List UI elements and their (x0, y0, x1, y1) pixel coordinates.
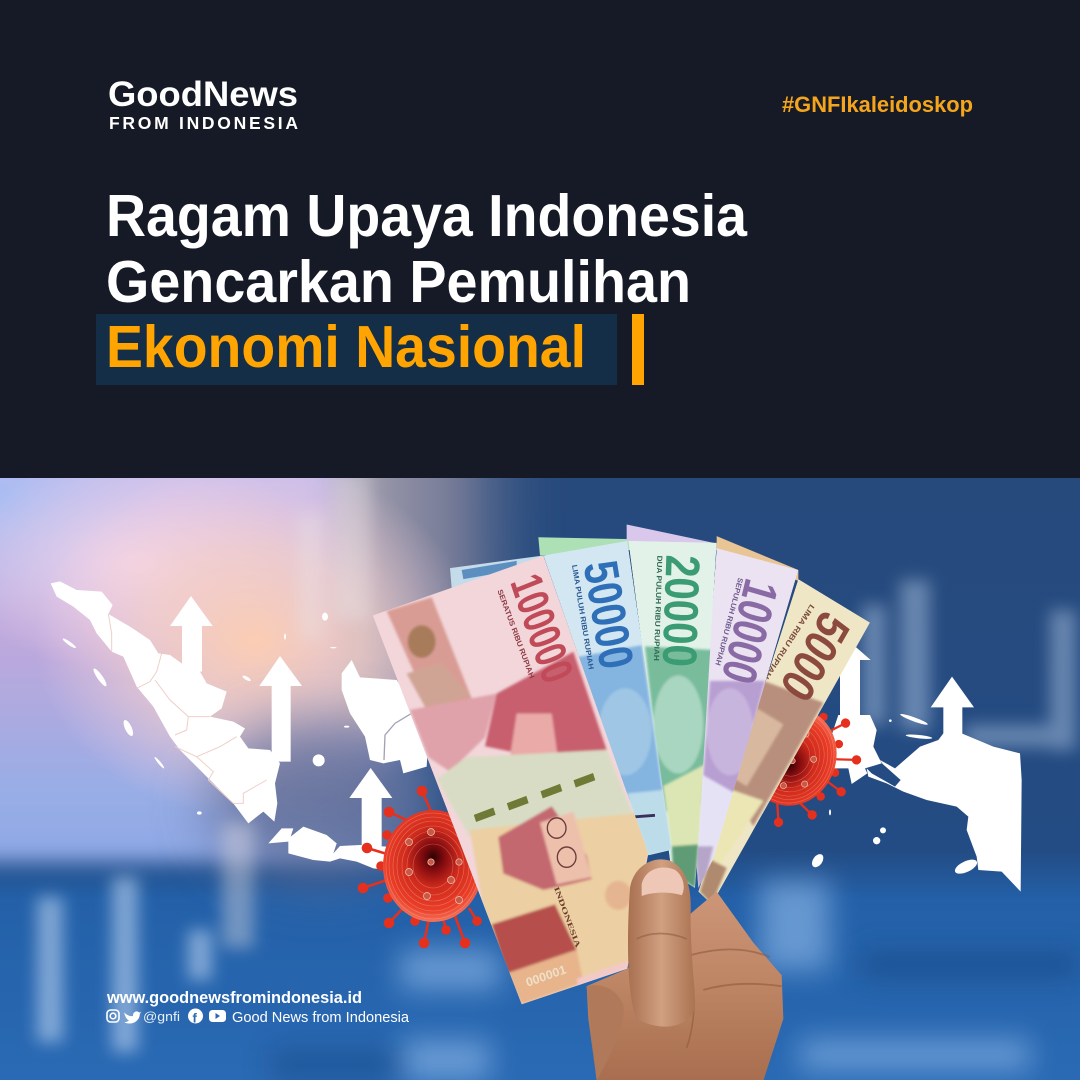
map: Sulawesi (830, 715, 882, 784)
hand holding notes (587, 859, 783, 1080)
banknote: 10000 (695, 548, 798, 888)
icon: facebook: f (192, 1010, 198, 1026)
arrow: up, Papua (931, 677, 974, 737)
icon: facebook (188, 1008, 203, 1024)
footer: website and social handles: www.goodnewsfromindonesia.id (106, 989, 362, 1007)
thumb (628, 859, 695, 1027)
banknote: 10000: SEPULUH RIBU RUPIAH (713, 577, 745, 667)
banknote: 100000: 100000 (501, 567, 583, 690)
banknote: 20000 (628, 541, 717, 888)
icon: youtube (209, 1010, 226, 1022)
icon: coronavirus, right (770, 712, 862, 827)
footer: website and social handles: Good News from Indonesia (232, 1010, 410, 1026)
banknote: 50000: 50000 (573, 556, 644, 673)
arrow: up, Sumatra (170, 596, 213, 672)
arrow: up, Java (349, 768, 392, 847)
banknote: 20000: 20000 (652, 554, 710, 668)
title highlight: Ekonomi Nasional: Ekonomi Nasional (106, 314, 586, 380)
map: eastern islets (810, 712, 979, 877)
map: Java (268, 827, 387, 870)
banknote: 50000 (543, 541, 672, 855)
map: Papua (867, 733, 1022, 892)
logo: GoodNews from Indonesia: GoodNews (108, 75, 298, 114)
logo: GoodNews from Indonesia: FROM INDONESIA (109, 113, 298, 133)
banknote: 100000 (373, 555, 650, 1004)
back edges of notes (450, 525, 798, 588)
photo panel: recovery illustration (0, 478, 1080, 1080)
hashtag: #GNFIkaleidoskop (782, 92, 973, 117)
arrow: up, middle (259, 656, 302, 762)
banknote: 100000: INDONESIA (552, 885, 583, 949)
logo: GoodNews from Indonesia (108, 75, 298, 133)
icon: instagram (107, 1010, 119, 1022)
banknote: 5000: 5000 (770, 602, 859, 711)
map: Sumatra (51, 581, 428, 870)
map: Kalimantan (342, 660, 428, 773)
banknote: 20000: DUA PULUH RIBU RUPIAH (652, 555, 664, 662)
map: small islands west of Sumatra (62, 613, 349, 815)
banknote: 5000 (698, 579, 870, 904)
footer: website and social handles: @gnfi (143, 1009, 180, 1024)
title: Gencarkan Pemulihan (106, 249, 691, 315)
arrow: up, Sulawesi (840, 647, 870, 715)
footer: website and social handles (106, 991, 409, 1024)
dark header panel (0, 0, 1080, 478)
banknote: 100000: 000001 (524, 962, 568, 990)
banknote: 50000: LIMA PULUH RIBU RUPIAH (570, 564, 596, 671)
icon: twitter (124, 1011, 141, 1024)
icon: coronavirus, left (359, 787, 483, 947)
map and arrows east of the fan (810, 643, 1022, 892)
title: Ragam Upaya Indonesia (106, 183, 748, 249)
banknote: 5000: LIMA RIBU RUPIAH (762, 603, 816, 681)
banknote: 10000: 10000 (711, 574, 789, 690)
rupiah banknotes fan (373, 525, 870, 1080)
banknote: 100000: SERATUS RIBU RUPIAH (496, 588, 536, 680)
blurred chart background (0, 478, 1080, 1080)
title (96, 183, 748, 385)
